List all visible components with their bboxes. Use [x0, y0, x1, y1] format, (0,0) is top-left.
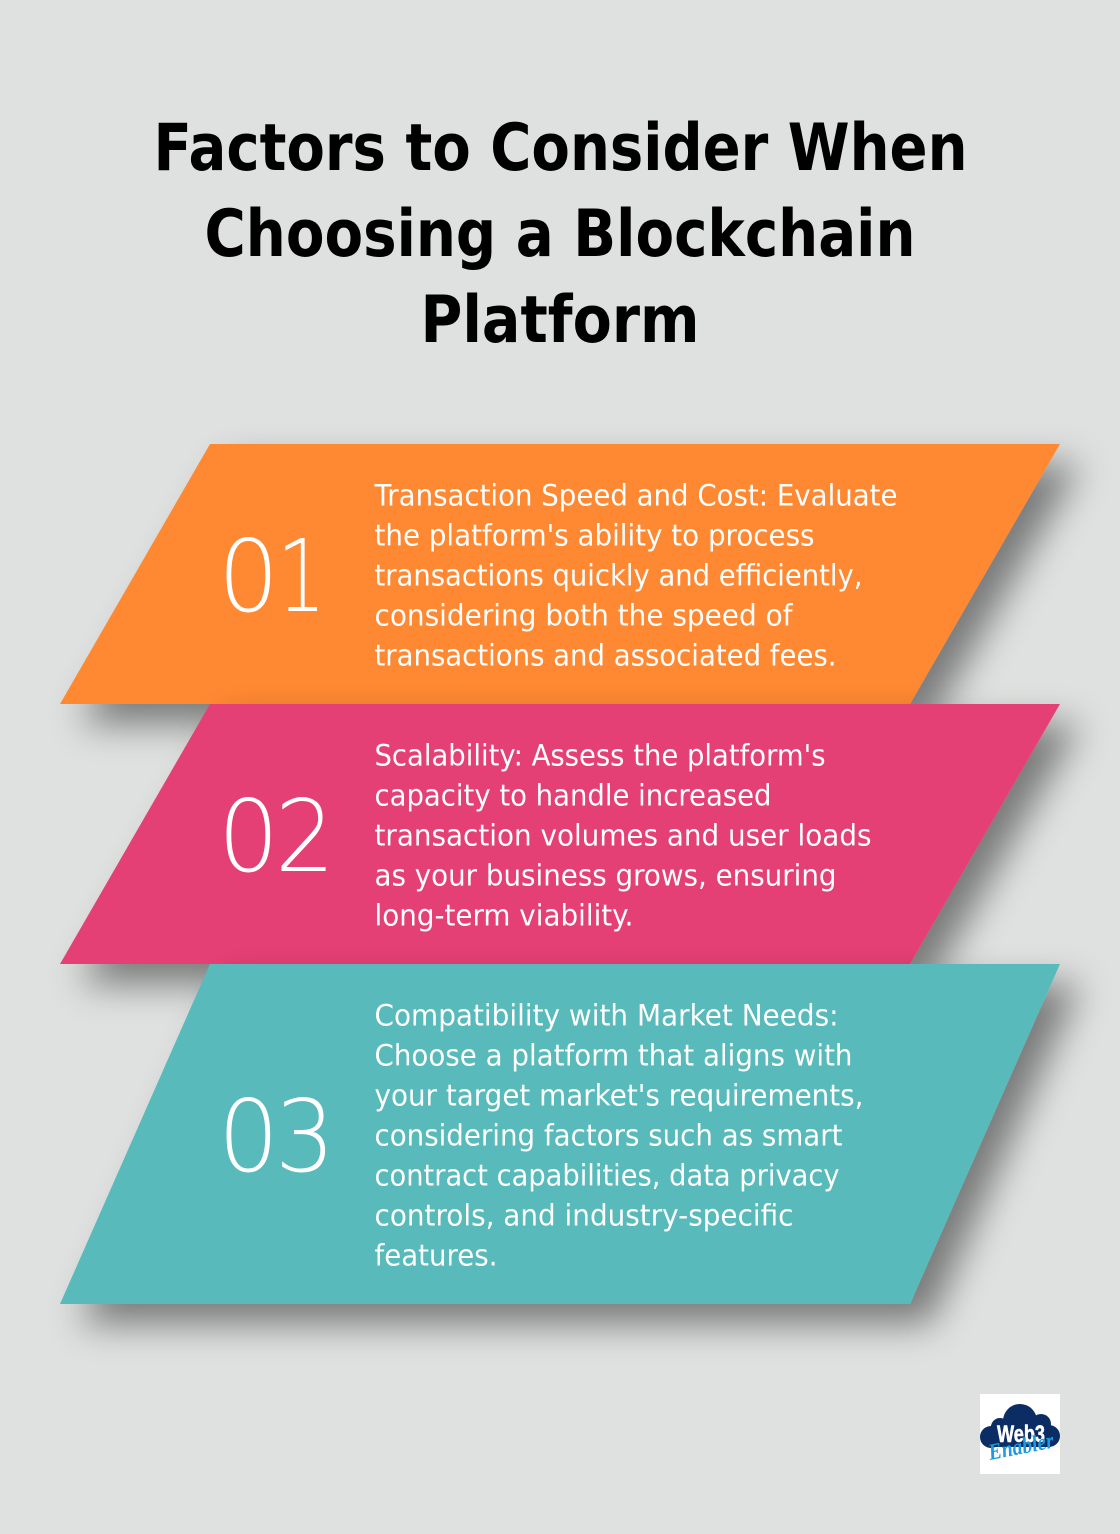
orange parallelogram	[60, 444, 1060, 704]
teal parallelogram	[60, 964, 1060, 1304]
number 02: 0	[218, 778, 279, 895]
text block 03: Compatibility with Market Needs:	[374, 998, 838, 1032]
number 01: 1	[277, 518, 326, 635]
text block 02: long-term viability.	[374, 898, 634, 932]
text block 01	[374, 478, 898, 672]
icon: Web3 Enabler logo: Enabler	[985, 1428, 1057, 1465]
text block 03: features.	[374, 1238, 498, 1272]
number 02	[218, 778, 335, 895]
number 02: 2	[275, 778, 335, 895]
text block 03: your target market's requirements,	[374, 1078, 864, 1112]
number 03	[218, 1078, 335, 1195]
panel: 03 compatibility with market needs	[60, 964, 1060, 1304]
text block 02: Scalability: Assess the platform's	[374, 738, 826, 772]
text block 02: transaction volumes and user loads	[374, 818, 872, 852]
text block 03: controls, and industry-specific	[374, 1198, 794, 1232]
text block 02: as your business grows, ensuring	[374, 858, 836, 892]
text block 02	[374, 738, 872, 932]
pink parallelogram	[60, 704, 1060, 964]
title	[154, 111, 968, 358]
panel: 01 transaction speed and cost	[60, 444, 1060, 704]
title: Platform	[420, 283, 700, 358]
text block 02: capacity to handle increased	[374, 778, 772, 812]
text block 01: considering both the speed of	[374, 598, 793, 632]
text block 01: the platform's ability to process	[374, 518, 814, 552]
title: Choosing a Blockchain	[204, 197, 916, 272]
text block 01: transactions quickly and efficiently,	[374, 558, 862, 592]
panel: 02 scalability	[60, 704, 1060, 964]
text block 03	[374, 998, 864, 1272]
text block 03: contract capabilities, data privacy	[374, 1158, 840, 1192]
icon: Web3 Enabler logo	[980, 1394, 1060, 1474]
icon: Web3 Enabler logo: Web3	[997, 1421, 1045, 1448]
text block 03: considering factors such as smart	[374, 1118, 842, 1152]
text block 01: transactions and associated fees.	[374, 638, 836, 672]
number 01	[218, 518, 326, 635]
text block 01: Transaction Speed and Cost: Evaluate	[374, 478, 898, 512]
number 03: 0	[218, 1078, 279, 1195]
number 03: 3	[275, 1078, 335, 1195]
title: Factors to Consider When	[154, 111, 968, 186]
number 01: 0	[218, 518, 279, 635]
text block 03: Choose a platform that aligns with	[374, 1038, 852, 1072]
